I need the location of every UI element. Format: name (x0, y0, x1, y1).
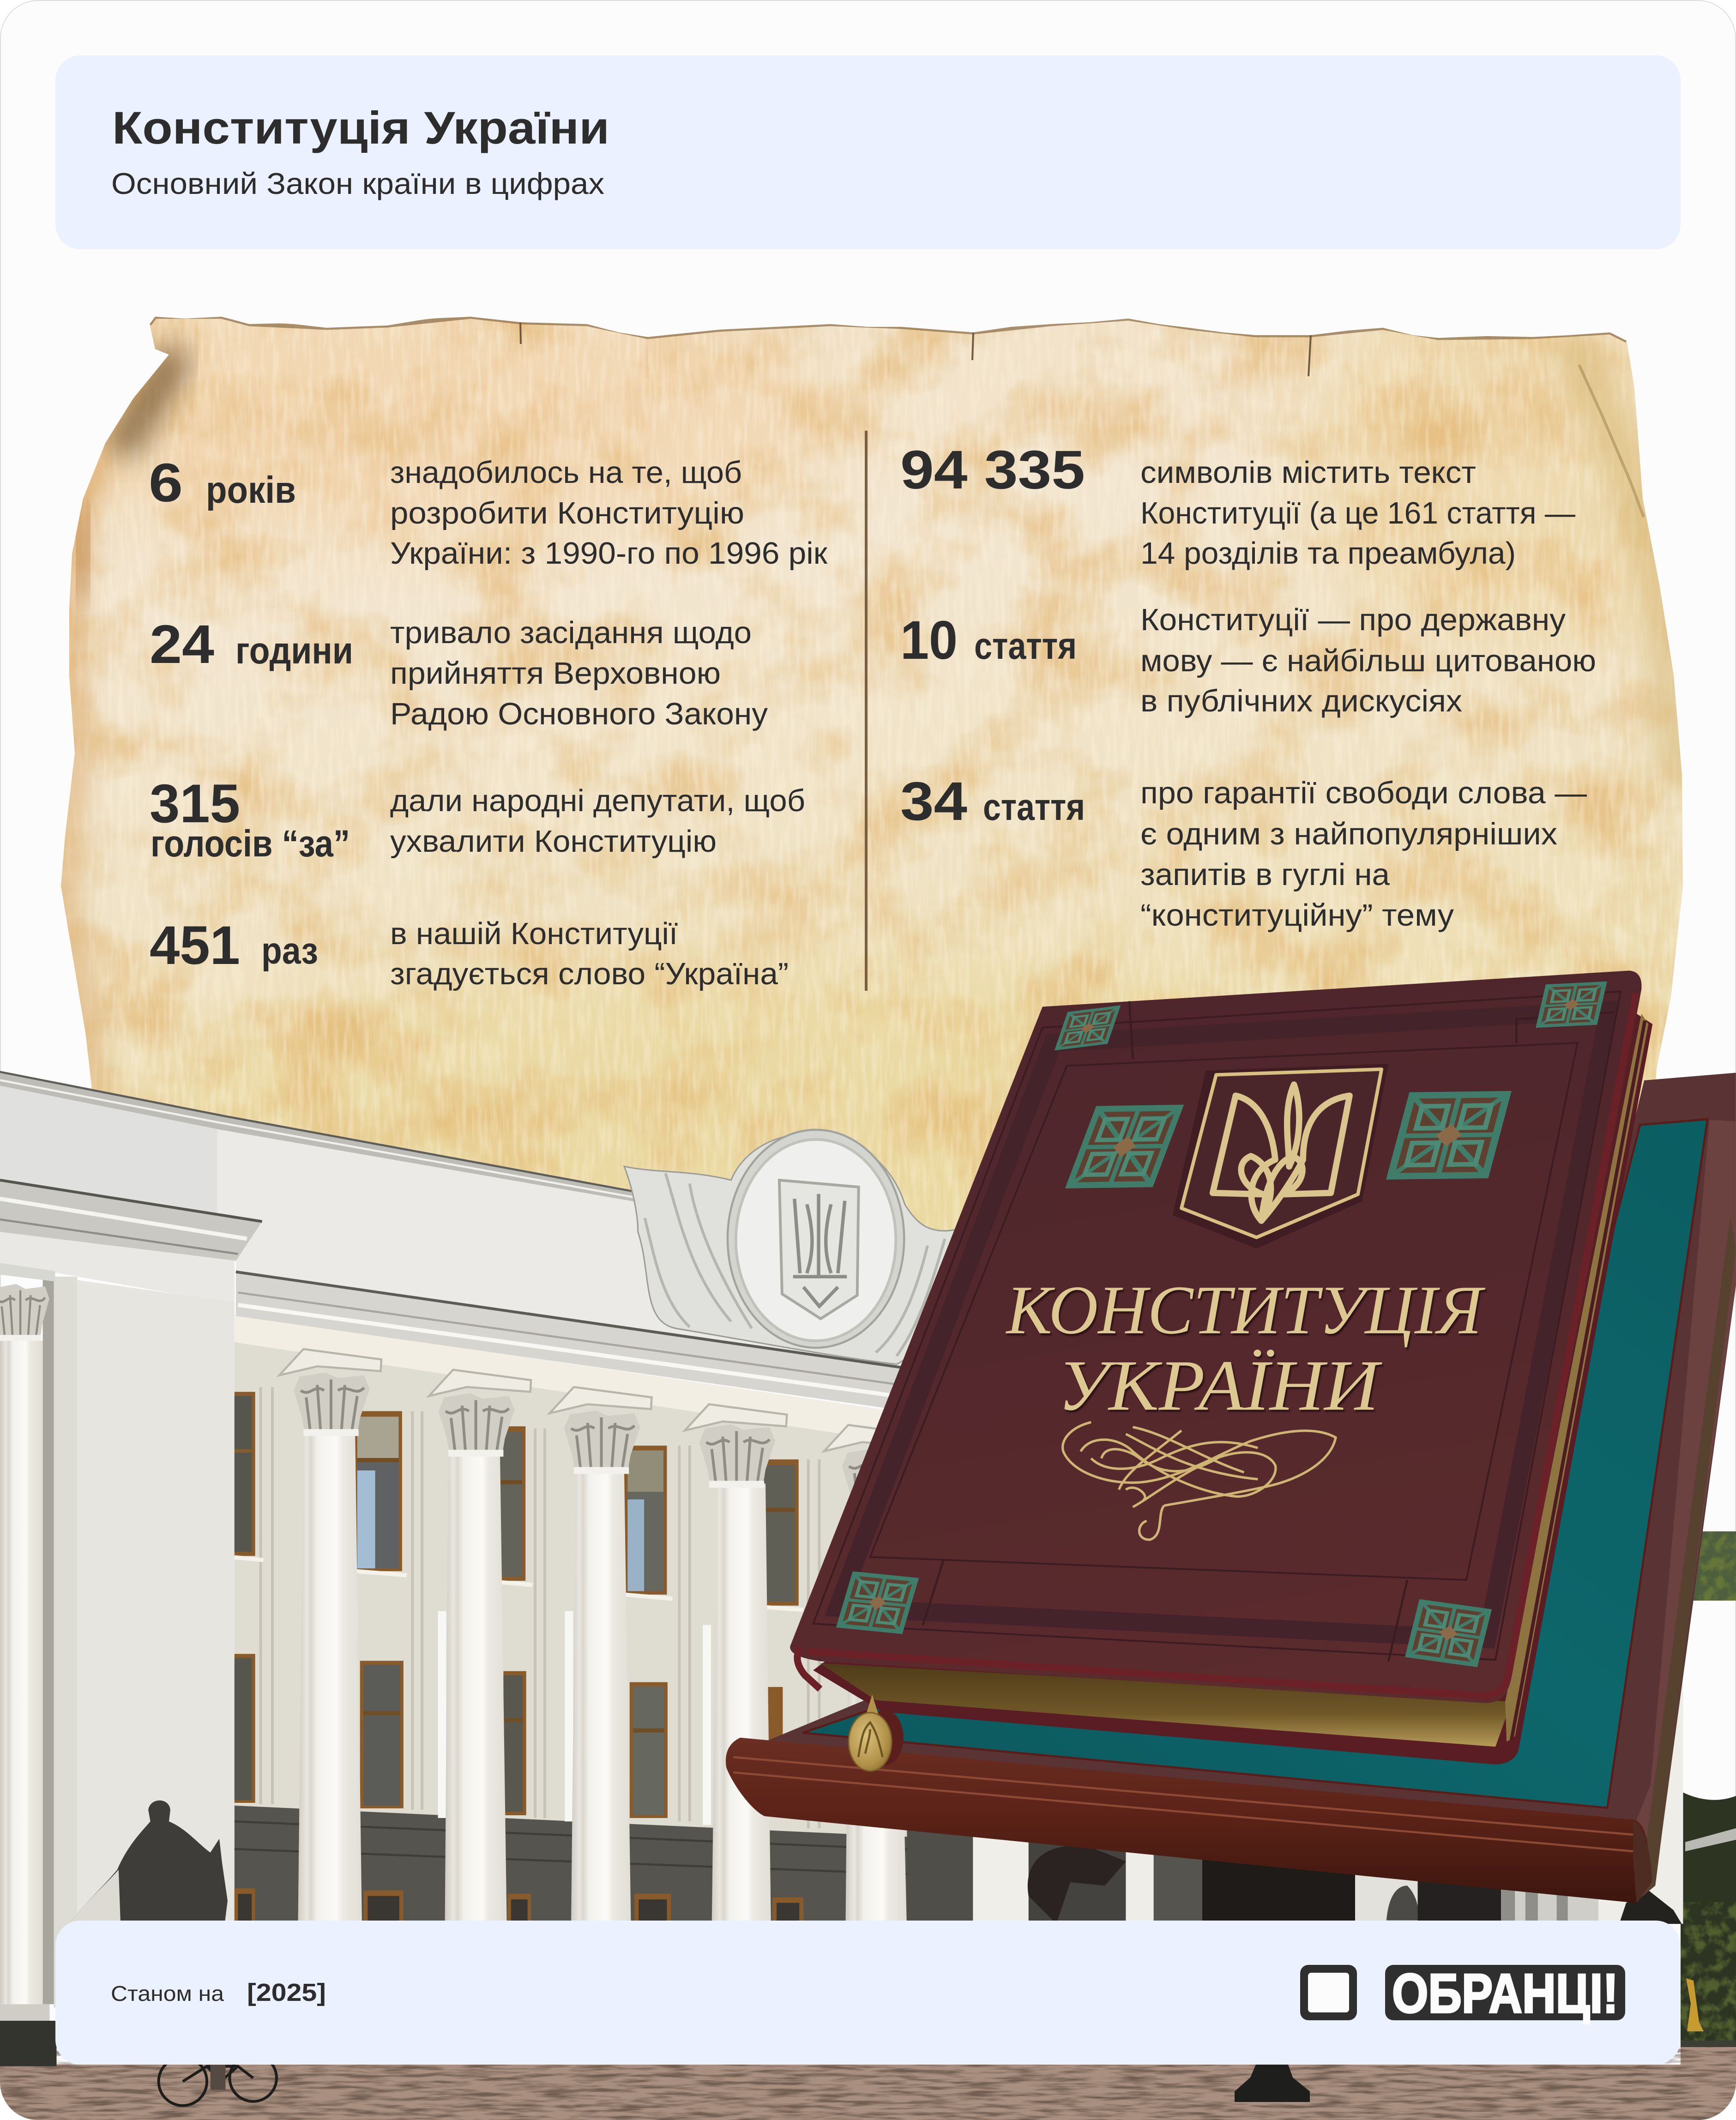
back cover (813, 1014, 1652, 1765)
stat: 94 335: Конституції (а це 161 стаття — (1140, 496, 1575, 530)
pavement (0, 2041, 1736, 2120)
stat: 6 років: України: з 1990-го по 1996 рік (390, 536, 828, 571)
stat: 315 голосів: голосів “за” (151, 823, 350, 865)
stat: 34 стаття: про гарантії свободи слова — (1140, 776, 1587, 810)
logo icon (1300, 1965, 1357, 2020)
stat: 10 стаття: в публічних дискусіях (1140, 684, 1462, 718)
stat: 6 років: 6 (149, 452, 183, 513)
stat: 6 років: знадобилось на те, щоб (390, 455, 742, 490)
stat: 34 стаття: “конституційну” тему (1140, 898, 1454, 933)
colonnade wall (235, 1342, 965, 1935)
book cover knot ornaments (839, 983, 1604, 1665)
footer panel (55, 1921, 1681, 2065)
cover title: КОНСТИТУЦІЯ (1006, 1271, 1485, 1349)
building: Verkhovna Rada (0, 1072, 1031, 2106)
page block (820, 1014, 1648, 1747)
stat: 24 години (150, 614, 768, 731)
book on stand (726, 970, 1736, 1903)
attic wall (0, 1084, 965, 1397)
stat: 10 стаття (900, 602, 1596, 718)
header panel (55, 55, 1681, 249)
stat: 24 години: тривало засідання щодо (390, 615, 752, 650)
stat: 24 години: прийняття Верховною (390, 656, 721, 691)
stat: 10 стаття: Конституції — про державну (1140, 602, 1566, 637)
monument sculpture (66, 1801, 228, 1928)
cover lip (797, 993, 1636, 1696)
colonnade cornice (236, 1272, 965, 1420)
left column (0, 1263, 56, 2066)
logo wordmark: ОБРАНЦІ! (1392, 1963, 1618, 2024)
shield (1172, 1064, 1388, 1248)
stat: 315 голосів: дали народні депутати, щоб (390, 783, 805, 818)
upper windows (235, 1392, 803, 1610)
stat: 34 стаття: стаття (983, 786, 1085, 828)
corner ornaments (646, 923, 647, 924)
lower building strip behind book (907, 1618, 1683, 1924)
thin pilaster slips (442, 1611, 707, 1825)
stat: 6 років: років (206, 469, 296, 511)
stat: 34 стаття: є одним з найпопулярніших (1140, 817, 1557, 851)
right side trees and background (1681, 1531, 1736, 2059)
stat: 24 години: години (235, 630, 353, 672)
trident (1213, 1084, 1350, 1221)
subtitle: Основний Закон країни в цифрах (111, 167, 604, 200)
date label: Станом на (111, 1981, 224, 2006)
gold flourish (1063, 1422, 1336, 1540)
cover title: УКРАЇНИ (1058, 1346, 1383, 1426)
column divider (865, 431, 868, 991)
colonnade soffit (235, 1314, 965, 1452)
stat: 10 стаття: 10 (900, 610, 958, 671)
stat: 315 голосів: ухвалити Конституцію (390, 824, 717, 859)
ground floor (235, 1806, 979, 1949)
embossed border (813, 991, 1621, 1661)
coat of arms relief (624, 1130, 958, 1364)
stat: 451 раз: згадується слово “Україна” (390, 957, 789, 991)
lower windows (235, 1654, 783, 1818)
wall pilaster strips (261, 1387, 820, 1828)
lamp and bicycle (159, 2054, 277, 2106)
street lamp base (1235, 2065, 1310, 2102)
stat: 34 стаття: 34 (900, 771, 967, 832)
stat: 451 раз: 451 (150, 915, 240, 976)
title: Конституція України (112, 102, 609, 153)
year: [2025] (247, 1979, 326, 2006)
stat: 315 голосів: 315 (150, 773, 240, 834)
medal pendant (849, 1695, 904, 1771)
cover title (1006, 1271, 1485, 1426)
upper cornice of pavilion (0, 1180, 262, 1261)
stat: 10 стаття: стаття (974, 625, 1077, 667)
stat: 34 стаття (900, 771, 1587, 933)
stat: 24 години: Радою Основного Закону (390, 697, 768, 731)
stat: 34 стаття: запитів в гуглі на (1140, 857, 1390, 892)
colonnade columns (279, 1349, 1031, 1932)
stat: 451 раз: раз (261, 930, 318, 972)
teal lining (803, 1119, 1707, 1808)
golden statue (1686, 1978, 1704, 2031)
stat: 451 раз (150, 915, 789, 991)
pavilion frieze (0, 1232, 235, 1304)
stat: 10 стаття: мову — є найбільш цитованою (1140, 644, 1596, 678)
stat: 94 335: 94 335 (900, 440, 1085, 500)
stat: 94 335: 14 розділів та преамбула) (1140, 536, 1516, 571)
roof cornice (0, 1072, 636, 1202)
stat: 451 раз: в нашій Конституції (390, 916, 678, 951)
stand side (1637, 1120, 1736, 1882)
pilaster (43, 1273, 77, 2008)
stat: 6 років (149, 452, 828, 571)
stand ledge (726, 1738, 1652, 1903)
front cover (790, 970, 1641, 1703)
stat: 94 335 (900, 440, 1575, 571)
stat: 315 голосів (150, 773, 805, 865)
stand back plate (765, 1073, 1736, 1902)
parchment sheet (61, 317, 1683, 1247)
pavilion face (77, 1280, 235, 1928)
stat: 24 години: 24 (150, 614, 214, 675)
stat: 6 років: розробити Конституцію (390, 496, 744, 530)
stat: 94 335: символів містить текст (1140, 455, 1476, 490)
